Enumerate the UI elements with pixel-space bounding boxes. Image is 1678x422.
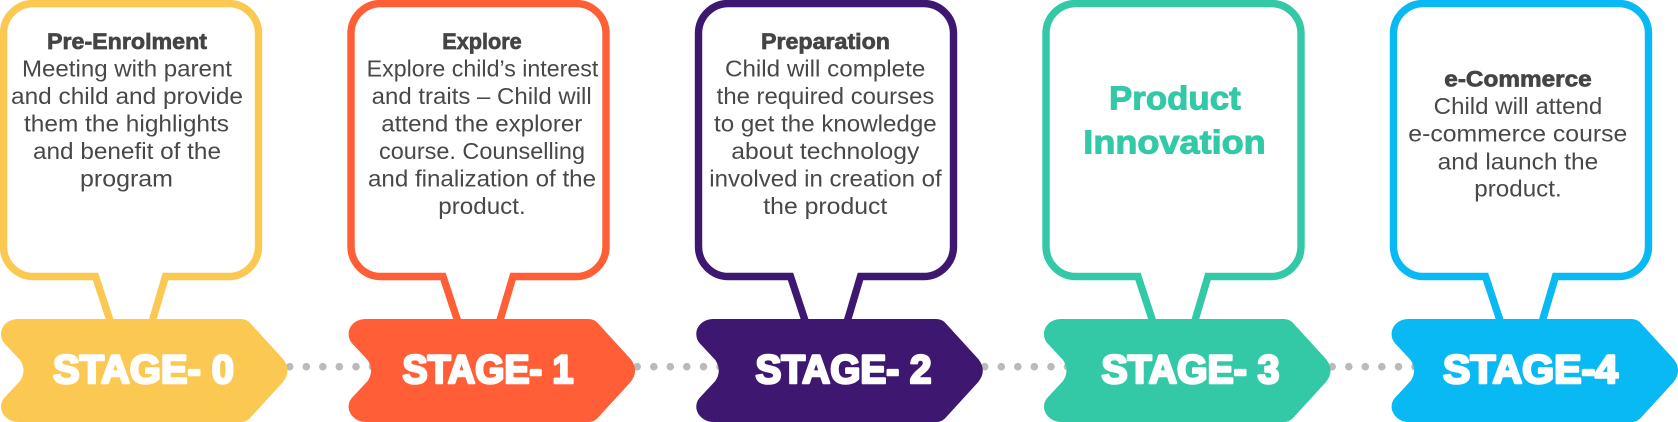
heading: e-Commerce: e-Commerce [1444, 67, 1592, 92]
label: STAGE- 1: STAGE- 1 [402, 348, 574, 392]
heading: Explore: Explore [442, 29, 522, 54]
text block: stage 4 description: product. [1474, 176, 1562, 202]
panel: stage 2 preparation [696, 4, 983, 422]
label: STAGE- 2: STAGE- 2 [756, 348, 932, 392]
heading: Product Innovation: Product [1109, 79, 1241, 116]
arrow banner: stage 4 [1392, 319, 1678, 422]
text block: stage 0 description: Meeting with parent [22, 56, 233, 82]
text block: stage 4 description: e-commerce course [1408, 121, 1627, 147]
text block: stage 1 description: course. Counselling [379, 138, 585, 164]
heading: Product Innovation [1083, 79, 1266, 160]
text block: stage 1 description [367, 56, 599, 219]
arrow banner: stage 3 [1044, 319, 1330, 422]
speech bubble: stage 0 [4, 4, 258, 322]
text block: stage 0 description [11, 56, 243, 192]
panel: stage 4 e-commerce [1392, 4, 1678, 422]
speech bubble: stage 2 [698, 4, 954, 322]
text block: stage 1 description: and traits – Child will [372, 83, 592, 109]
text block: stage 0 description: program [80, 166, 173, 192]
speech bubble: stage 3 [1046, 4, 1301, 322]
text block: stage 4 description: Child will attend [1434, 93, 1602, 119]
text block: stage 1 description: Explore child’s interest [367, 56, 599, 82]
text block: stage 4 description [1408, 93, 1627, 202]
text block: stage 2 description: to get the knowledge [714, 111, 937, 137]
text block: stage 1 description: attend the explorer [381, 111, 583, 137]
text block: stage 0 description: and benefit of the [33, 138, 221, 164]
arrow banner: stage 1 [349, 319, 635, 422]
speech bubble: stage 1 [351, 4, 606, 322]
text block: stage 0 description: and child and provide [11, 83, 243, 109]
dotted connectors between stages [286, 363, 1419, 371]
text block: stage 1 description: and finalization of the [368, 166, 596, 192]
text block: stage 2 description: about technology [731, 138, 920, 164]
heading: Preparation: Preparation [761, 29, 890, 54]
label: STAGE-4: STAGE-4 [1443, 348, 1619, 392]
text block: stage 2 description [709, 56, 942, 219]
panel: stage 0 pre-enrolment [1, 4, 288, 422]
arrow banner: stage 0 [1, 319, 288, 422]
panel: stage 3 product innovation [1044, 4, 1330, 422]
panel: stage 1 explore [349, 4, 635, 422]
arrow banner: stage 2 [696, 319, 983, 422]
text block: stage 4 description: and launch the [1438, 148, 1598, 174]
text block: stage 2 description: the required courses [717, 83, 934, 109]
text block: stage 2 description: involved in creation of [709, 166, 942, 192]
label: STAGE- 0: STAGE- 0 [53, 348, 234, 392]
text block: stage 0 description: them the highlights [24, 111, 229, 137]
label: STAGE- 3: STAGE- 3 [1102, 348, 1280, 392]
text block: stage 2 description: Child will complete [725, 56, 925, 82]
text block: stage 1 description: product. [438, 193, 526, 219]
heading: Product Innovation: Innovation [1083, 123, 1266, 160]
text block: stage 2 description: the product [763, 193, 888, 219]
speech bubble: stage 4 [1394, 4, 1648, 322]
heading: Pre-Enrolment: Pre-Enrolment [47, 29, 208, 54]
